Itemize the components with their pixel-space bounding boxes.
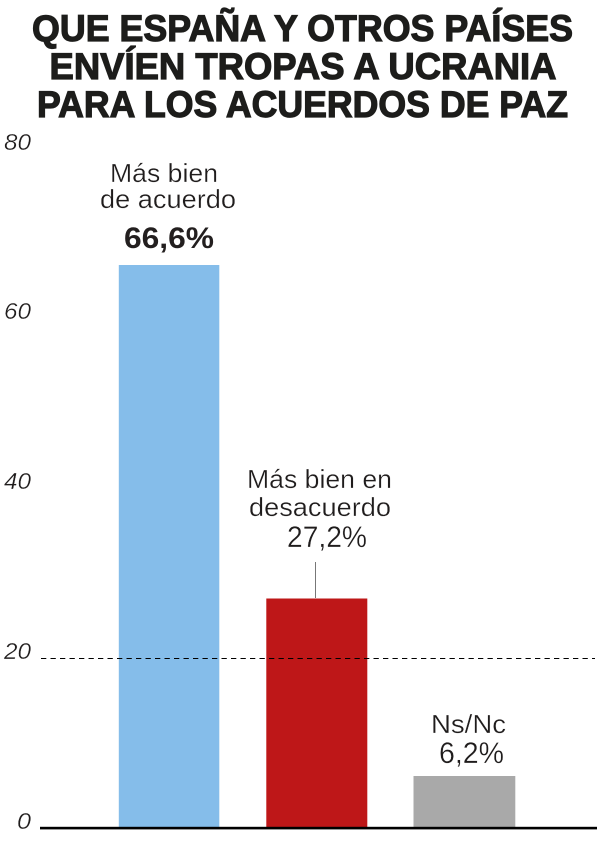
leader line bbox=[314, 562, 316, 598]
title: QUE ESPAÑA Y OTROS PAÍSES bbox=[32, 7, 573, 49]
y axis labels: 60 bbox=[4, 298, 31, 324]
label: ns/nc bbox=[431, 709, 506, 770]
label: ns/nc: 6,2% bbox=[439, 737, 504, 770]
label: más bien en desacuerdo: 27,2% bbox=[287, 521, 367, 554]
baseline axis bbox=[40, 827, 597, 829]
label: más bien de acuerdo: 66,6% bbox=[124, 222, 214, 255]
title: PARA LOS ACUERDOS DE PAZ bbox=[37, 83, 568, 125]
y axis labels: 80 bbox=[4, 129, 31, 155]
y axis labels: 0 bbox=[17, 808, 31, 834]
label: más bien de acuerdo: Más bien bbox=[110, 158, 218, 188]
y axis labels bbox=[3, 129, 31, 834]
reference line at 20 bbox=[41, 658, 595, 660]
label: más bien en desacuerdo bbox=[247, 464, 392, 554]
label: más bien en desacuerdo: desacuerdo bbox=[249, 492, 391, 522]
y axis labels: 40 bbox=[4, 468, 31, 494]
label: más bien de acuerdo bbox=[100, 158, 236, 255]
bar: más bien de acuerdo bbox=[119, 265, 219, 828]
label: más bien en desacuerdo: Más bien en bbox=[247, 464, 392, 494]
bar: ns/nc bbox=[414, 776, 515, 828]
label: ns/nc: Ns/Nc bbox=[431, 709, 506, 739]
bar: más bien en desacuerdo bbox=[266, 598, 367, 828]
y axis labels: 20 bbox=[3, 638, 31, 664]
title bbox=[32, 7, 573, 125]
label: más bien de acuerdo: de acuerdo bbox=[100, 184, 236, 214]
title: ENVÍEN TROPAS A UCRANIA bbox=[50, 45, 556, 87]
